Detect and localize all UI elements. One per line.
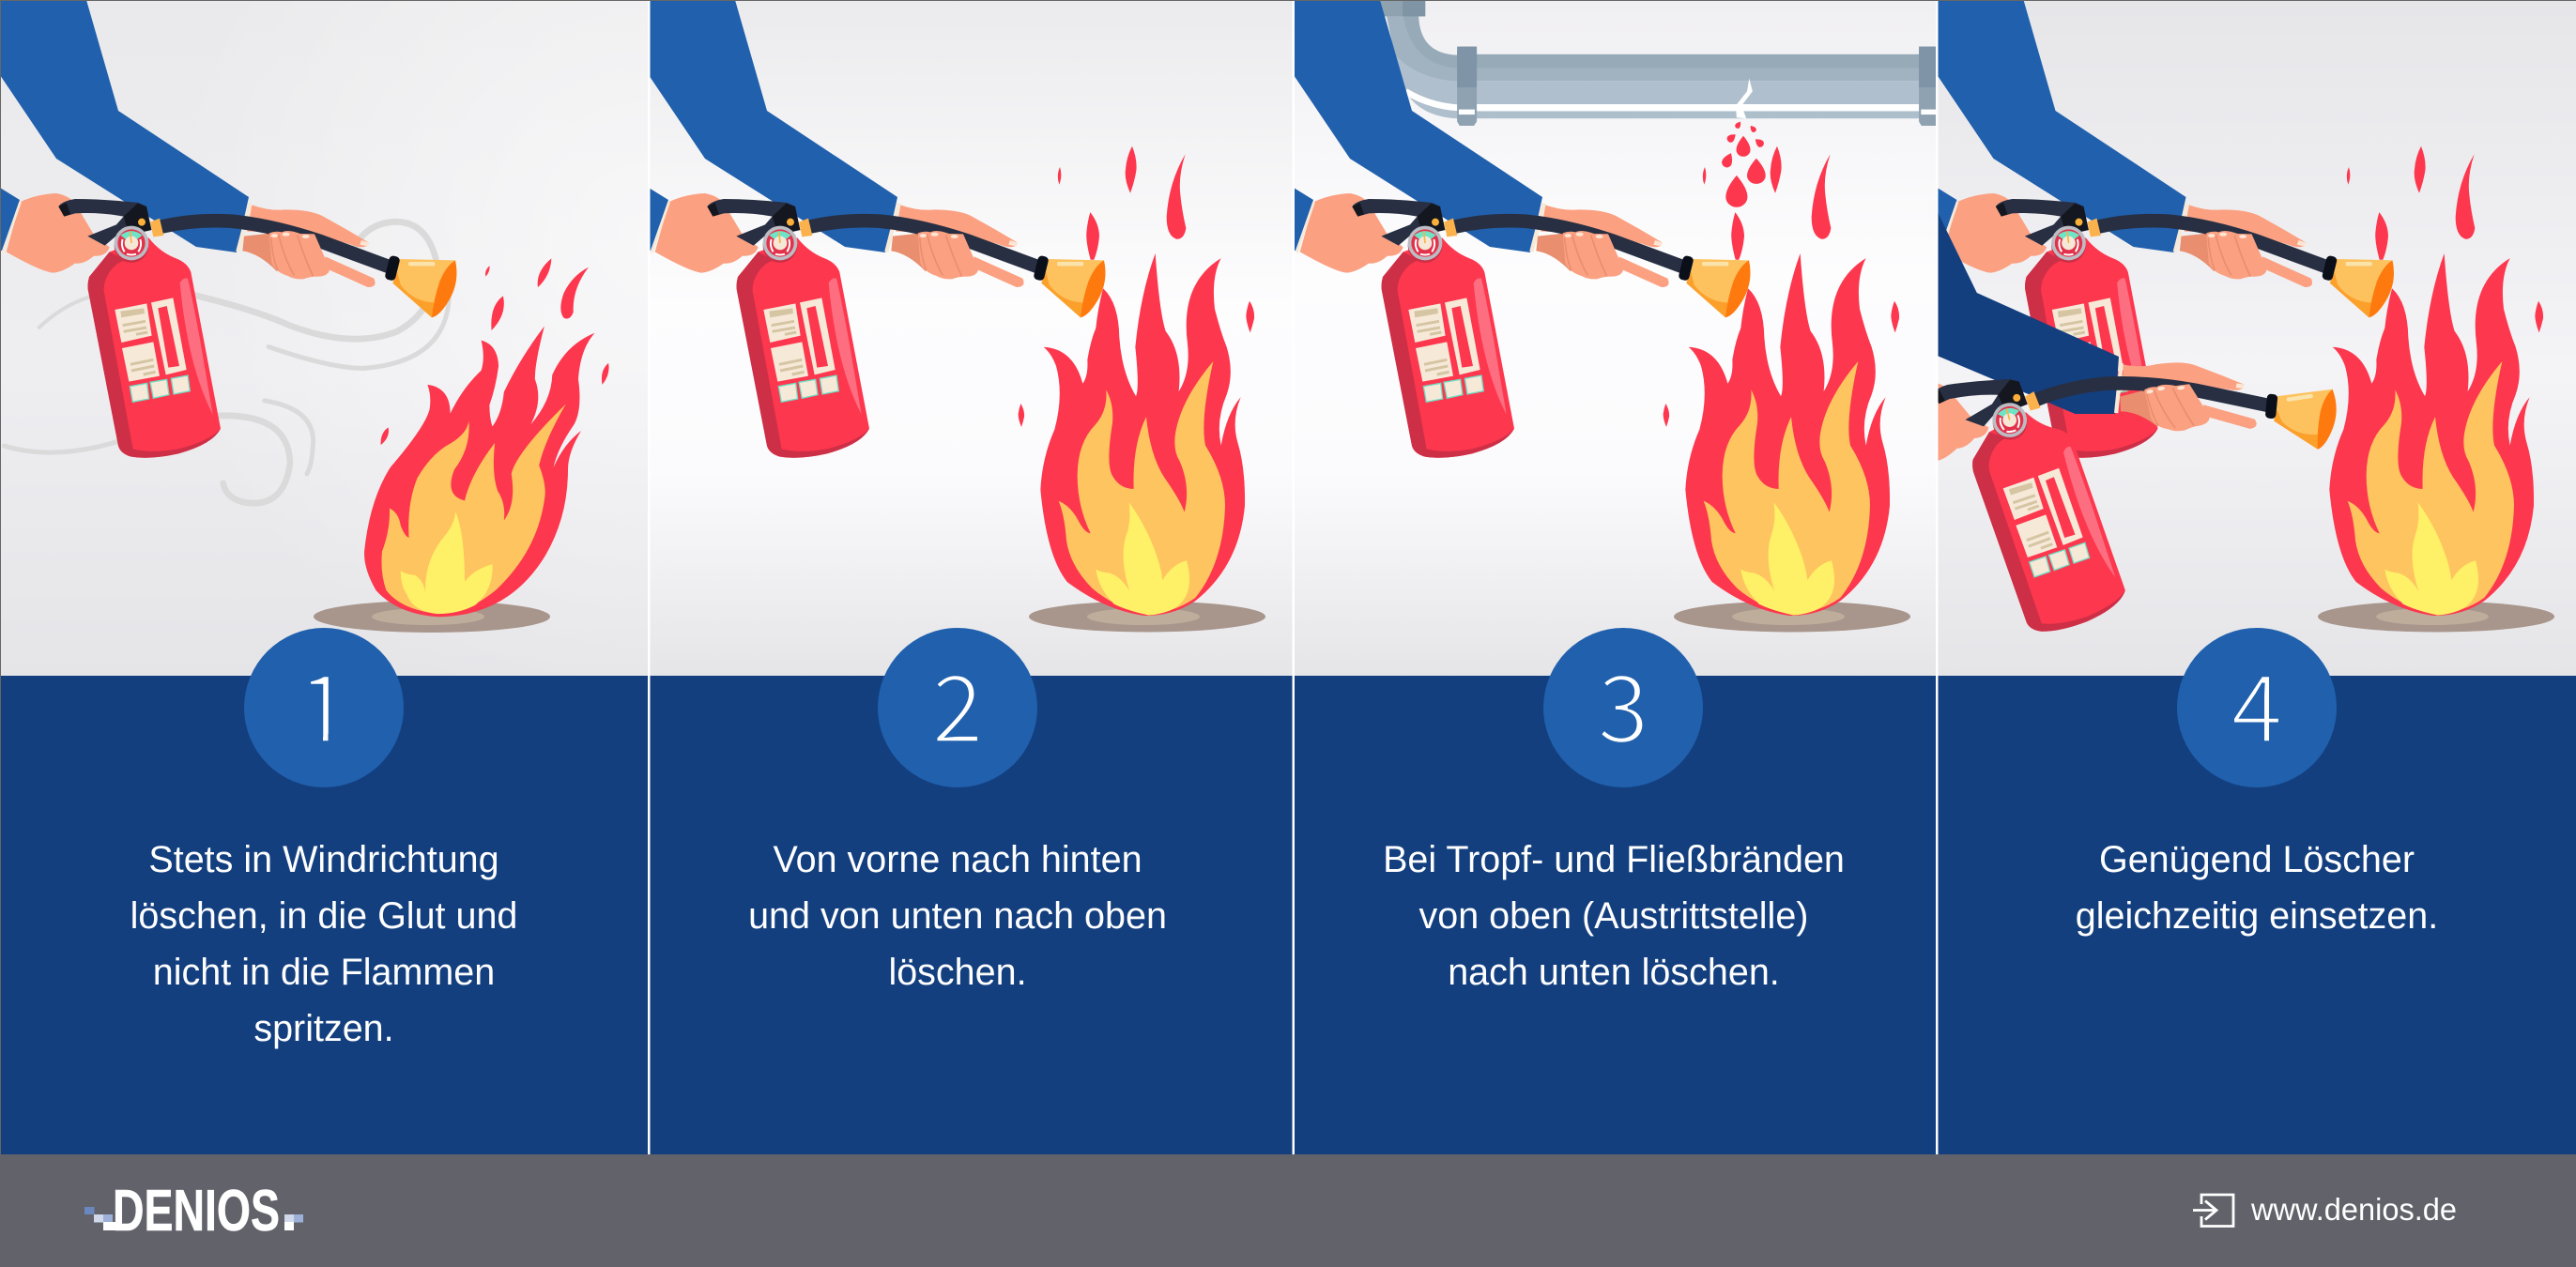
step 2 text: und von unten nach oben <box>748 895 1167 937</box>
upper arm with extinguisher <box>1938 0 2394 458</box>
step 1 text: löschen, in die Glut und <box>130 895 517 937</box>
step 1 text: Stets in Windrichtung <box>148 839 499 880</box>
fire <box>2308 146 2554 633</box>
footer bar <box>0 1154 2576 1267</box>
number badge 3: 3 <box>1597 634 1649 770</box>
arm with extinguisher <box>1294 0 1750 458</box>
step 3 text: nach unten löschen. <box>1448 952 1780 993</box>
arm with extinguisher <box>649 0 1105 458</box>
number badge 3 <box>1543 628 1703 787</box>
DENIOS logo: DENIOS <box>113 1179 280 1244</box>
step 4 text: Genügend Löscher <box>2099 839 2415 880</box>
arm with extinguisher <box>0 0 456 458</box>
fire <box>1664 146 1910 633</box>
number badge 2: 2 <box>931 634 984 770</box>
step 3 text: von oben (Austrittstelle) <box>1419 895 1808 937</box>
panel: step 3 dripping fire <box>1294 0 1937 993</box>
number badge 1 <box>244 628 404 787</box>
step 2 text: Von vorne nach hinten <box>773 839 1142 880</box>
wind lines <box>4 221 449 503</box>
number badge 4: 4 <box>2231 634 2283 770</box>
leaking pipe <box>1380 0 1937 126</box>
number badge 2 <box>878 628 1037 787</box>
icon: link arrow <box>2193 1195 2233 1226</box>
lower arm with extinguisher <box>1938 213 2337 632</box>
step 2 text: löschen. <box>888 952 1027 993</box>
panel: step 4 several extinguishers <box>1876 0 2554 937</box>
website url: www.denios.de <box>2250 1192 2457 1227</box>
panel: step 1 wind direction <box>0 0 609 1049</box>
step 4 text: gleichzeitig einsetzen. <box>2076 895 2438 937</box>
panel: step 2 front to back <box>649 0 1265 993</box>
number badge 1: 1 <box>298 634 350 770</box>
step 1 text: nicht in die Flammen <box>153 952 495 993</box>
falling drops <box>1720 120 1766 207</box>
step 3 text: Bei Tropf- und Fließbränden <box>1383 839 1845 880</box>
fire <box>1019 146 1265 633</box>
fire <box>314 258 609 633</box>
number badge 4 <box>2177 628 2337 787</box>
step 1 text: spritzen. <box>253 1008 394 1049</box>
